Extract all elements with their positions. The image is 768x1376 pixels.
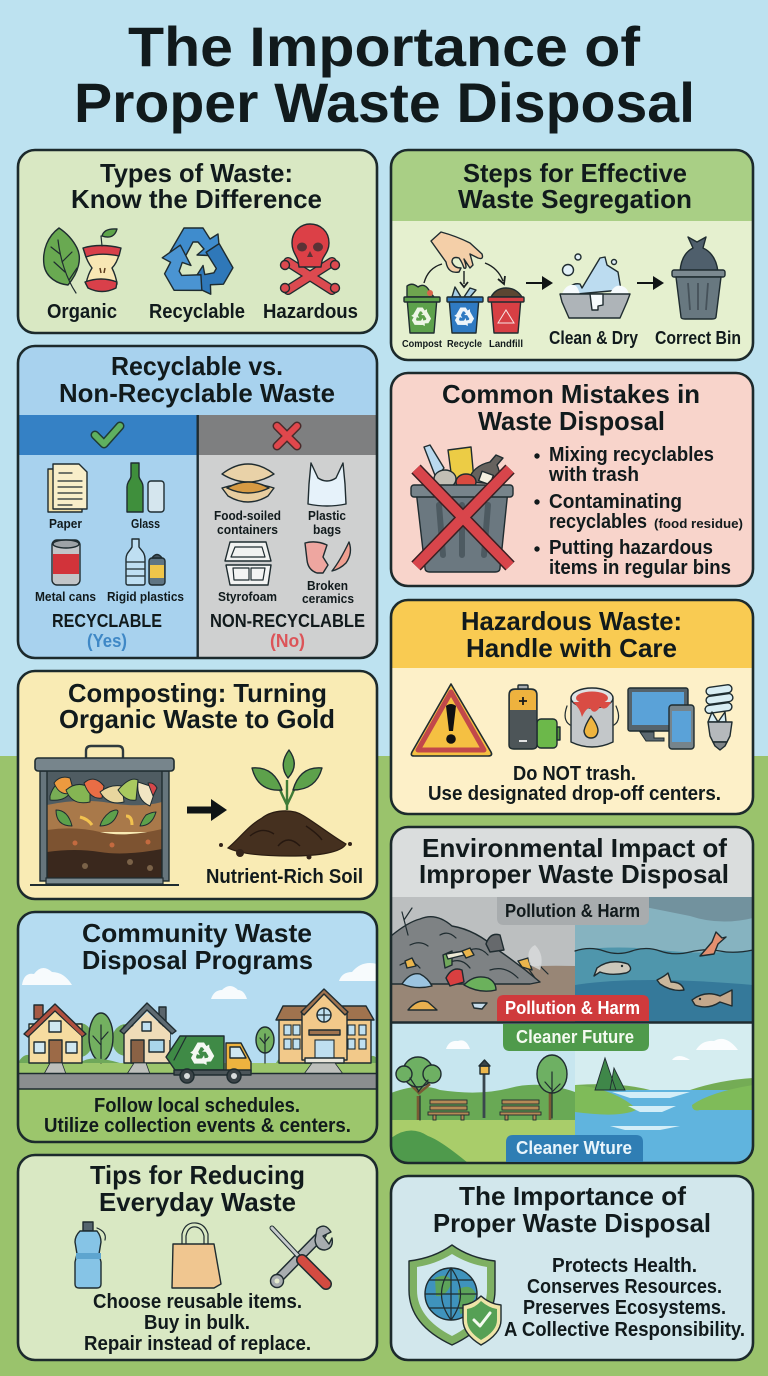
icon: water bottle xyxy=(75,1222,105,1288)
label: recyclable yes xyxy=(52,611,162,651)
heading: recyclable vs non-recyclable: Non-Recyclable Waste xyxy=(59,378,335,408)
icon: monitor and phone xyxy=(628,688,694,749)
text: importance benefits: Protects Health. xyxy=(552,1255,697,1277)
heading: hazardous waste: Hazardous Waste: xyxy=(461,606,682,636)
label: broken ceramics xyxy=(302,579,354,606)
heading: composting xyxy=(59,678,335,734)
heading: hazardous waste xyxy=(461,606,682,663)
label: non-recyclable no: (No) xyxy=(270,631,305,651)
label: non-recyclable no xyxy=(210,611,365,651)
heading: environmental impact: Environmental Impact of xyxy=(422,833,727,863)
list: mistakes: Contaminating xyxy=(549,491,682,513)
icon: recycle bin xyxy=(447,287,483,333)
icon: shield with globe xyxy=(409,1245,501,1345)
heading: tips: Tips for Reducing xyxy=(90,1160,305,1190)
label: recycle: Recycle xyxy=(447,338,482,350)
scene: background trees xyxy=(18,1013,377,1063)
text: importance benefits: A Collective Responsibility. xyxy=(504,1319,745,1341)
list: mistakes: recyclables xyxy=(549,511,647,533)
icon: wrench and screwdriver xyxy=(270,1226,332,1288)
text: community note xyxy=(44,1095,351,1137)
panel: composting xyxy=(18,671,377,899)
panel: tips xyxy=(18,1155,377,1360)
scene: school building xyxy=(276,989,374,1063)
text: hazardous note: Do NOT trash. xyxy=(513,763,636,785)
arrow: to correct bin xyxy=(637,276,664,290)
label: clean and dry: Clean & Dry xyxy=(549,328,638,348)
icon: paint can xyxy=(565,688,619,747)
icon: organic leaf and apple core xyxy=(44,228,121,293)
label: rigid plastics: Rigid plastics xyxy=(107,590,184,604)
title: Proper Waste Disposal xyxy=(74,71,695,134)
panel: recyclable vs non-recyclable xyxy=(18,346,377,658)
icon: rigid plastics xyxy=(126,539,165,585)
arrow: compost to soil xyxy=(187,799,227,821)
heading: hazardous waste: Handle with Care xyxy=(466,633,677,663)
label: nutrient-rich soil: Nutrient-Rich Soil xyxy=(206,866,363,888)
icon: red x xyxy=(277,426,297,446)
list: mistakes: items in regular bins xyxy=(549,557,731,579)
badge: pollution grey: Pollution & Harm xyxy=(505,901,640,921)
heading: environmental impact: Improper Waste Disposal xyxy=(419,859,729,889)
label: plastic bags: Plastic xyxy=(308,509,346,523)
icon: warning triangle xyxy=(411,684,492,756)
heading: community programs: Disposal Programs xyxy=(82,945,313,975)
text: importance benefits: Conserves Resources. xyxy=(527,1276,722,1298)
badge: cleaner future green: Cleaner Future xyxy=(516,1027,634,1047)
badge: cleaner future blue: Cleaner Wture xyxy=(516,1138,632,1158)
icon: broken ceramics xyxy=(305,542,350,573)
scene: clouds xyxy=(22,963,377,999)
icon: compost bin with layers xyxy=(30,746,179,885)
icon: glass bottle and jar xyxy=(127,463,164,512)
heading: recyclable vs non-recyclable xyxy=(59,351,335,408)
text: community note: Follow local schedules. xyxy=(94,1095,300,1117)
icon: recycle arrows xyxy=(156,228,240,302)
panel: types of waste xyxy=(18,150,377,333)
icon: cfl bulb xyxy=(705,684,733,750)
panel: hazardous waste xyxy=(391,600,753,814)
list: mistakes: (food residue) xyxy=(654,516,743,531)
list: mistakes xyxy=(534,444,743,579)
icon: wash basin xyxy=(560,254,630,318)
arrow: to clean and dry xyxy=(526,276,553,290)
heading: environmental impact xyxy=(419,833,729,889)
scene: house one xyxy=(24,1004,86,1063)
list: mistakes: Putting hazardous xyxy=(549,537,713,559)
label: compost: Compost xyxy=(402,338,442,350)
icon: paper xyxy=(48,464,87,512)
badge: pollution grey xyxy=(497,897,649,925)
heading: common mistakes: Waste Disposal xyxy=(478,406,665,436)
label: paper: Paper xyxy=(49,517,82,531)
label: correct bin: Correct Bin xyxy=(655,328,741,348)
heading: common mistakes: Common Mistakes in xyxy=(442,379,700,409)
scene: landfill pollution xyxy=(391,897,575,1022)
label: glass: Glass xyxy=(131,517,160,531)
scene: clean lake xyxy=(575,1022,753,1163)
heading: importance summary: Proper Waste Disposal xyxy=(433,1208,711,1238)
label: landfill: Landfill xyxy=(489,338,523,350)
text: tips xyxy=(84,1291,311,1355)
scene: driveways xyxy=(44,1063,343,1074)
scene: small tree xyxy=(256,1027,274,1063)
list: mistakes: Mixing recyclables xyxy=(549,444,714,466)
panel: environmental impact xyxy=(391,827,753,1163)
icon: crossed-out trash basket xyxy=(411,445,513,572)
panel: importance summary xyxy=(391,1176,753,1360)
heading: community programs xyxy=(82,918,313,975)
heading: common mistakes xyxy=(442,379,700,436)
panel: community programs xyxy=(18,912,377,1143)
icon: hand xyxy=(431,232,482,272)
icon: trash can with bag xyxy=(672,237,725,319)
icon: plastic bag xyxy=(308,463,346,506)
icon: green check xyxy=(95,426,120,444)
label: food-soiled containers xyxy=(214,509,281,537)
title: The Importance of xyxy=(128,15,640,78)
arrows: from hand to bins xyxy=(424,263,505,287)
label: plastic bags xyxy=(308,509,346,537)
icon: landfill bin xyxy=(488,288,524,333)
icon: plant in soil xyxy=(219,750,352,860)
text: tips: Buy in bulk. xyxy=(144,1312,250,1334)
scene: polluted water xyxy=(575,897,753,1022)
text: tips: Choose reusable items. xyxy=(93,1291,302,1313)
heading: importance summary xyxy=(433,1181,711,1238)
heading: recyclable vs non-recyclable: Recyclable vs. xyxy=(111,351,283,381)
heading: community programs: Community Waste xyxy=(82,918,312,948)
panel: segregation steps xyxy=(391,150,753,360)
text: community note: Utilize collection events & centers. xyxy=(44,1115,351,1137)
panel: common mistakes xyxy=(391,373,753,586)
heading: composting: Organic Waste to Gold xyxy=(59,704,335,734)
icon: compost bin xyxy=(404,284,440,333)
scene: house two xyxy=(120,1003,176,1063)
heading: segregation steps: Waste Segregation xyxy=(458,184,692,214)
icon: skull and crossbones xyxy=(280,224,340,292)
label: recyclable: Recyclable xyxy=(149,301,245,323)
label: non-recyclable no: NON-RECYCLABLE xyxy=(210,611,365,631)
badge: pollution red: Pollution & Harm xyxy=(505,998,640,1018)
heading: types of waste: Know the Difference xyxy=(71,184,322,214)
badge: cleaner future green xyxy=(503,1024,649,1051)
label: broken ceramics: ceramics xyxy=(302,592,354,606)
title xyxy=(74,15,695,134)
icon: garbage truck xyxy=(166,1036,251,1083)
text: hazardous note xyxy=(428,763,721,805)
label: recyclable yes: (Yes) xyxy=(87,631,127,651)
label: plastic bags: bags xyxy=(313,523,341,537)
heading: types of waste xyxy=(71,158,322,214)
heading: tips: Everyday Waste xyxy=(99,1187,296,1217)
scene: clean park xyxy=(391,1022,575,1163)
text: tips: Repair instead of replace. xyxy=(84,1333,311,1355)
label: food-soiled containers: containers xyxy=(217,523,278,537)
text: importance benefits: Preserves Ecosystems. xyxy=(523,1297,726,1319)
label: food-soiled containers: Food-soiled xyxy=(214,509,281,523)
icon: batteries xyxy=(509,685,560,749)
label: metal cans: Metal cans xyxy=(35,590,96,604)
heading: composting: Composting: Turning xyxy=(68,678,327,708)
heading: types of waste: Types of Waste: xyxy=(100,158,293,188)
list: mistakes: with trash xyxy=(548,464,639,486)
label: organic: Organic xyxy=(47,301,117,323)
label: styrofoam: Styrofoam xyxy=(218,590,277,604)
heading: tips xyxy=(90,1160,305,1217)
label: hazardous: Hazardous xyxy=(263,301,358,323)
badge: cleaner future blue xyxy=(506,1135,643,1162)
text: hazardous note: Use designated drop-off centers. xyxy=(428,783,721,805)
icon: metal can xyxy=(52,540,80,585)
label: recyclable yes: RECYCLABLE xyxy=(52,611,162,631)
label: broken ceramics: Broken xyxy=(307,579,348,593)
icon: food-soiled containers xyxy=(222,464,274,502)
icon: shopping bag xyxy=(172,1223,221,1288)
heading: importance summary: The Importance of xyxy=(459,1181,686,1211)
heading: segregation steps xyxy=(458,158,692,214)
icon: styrofoam clamshell xyxy=(225,542,271,585)
text: importance benefits xyxy=(504,1255,745,1341)
heading: segregation steps: Steps for Effective xyxy=(463,158,687,188)
